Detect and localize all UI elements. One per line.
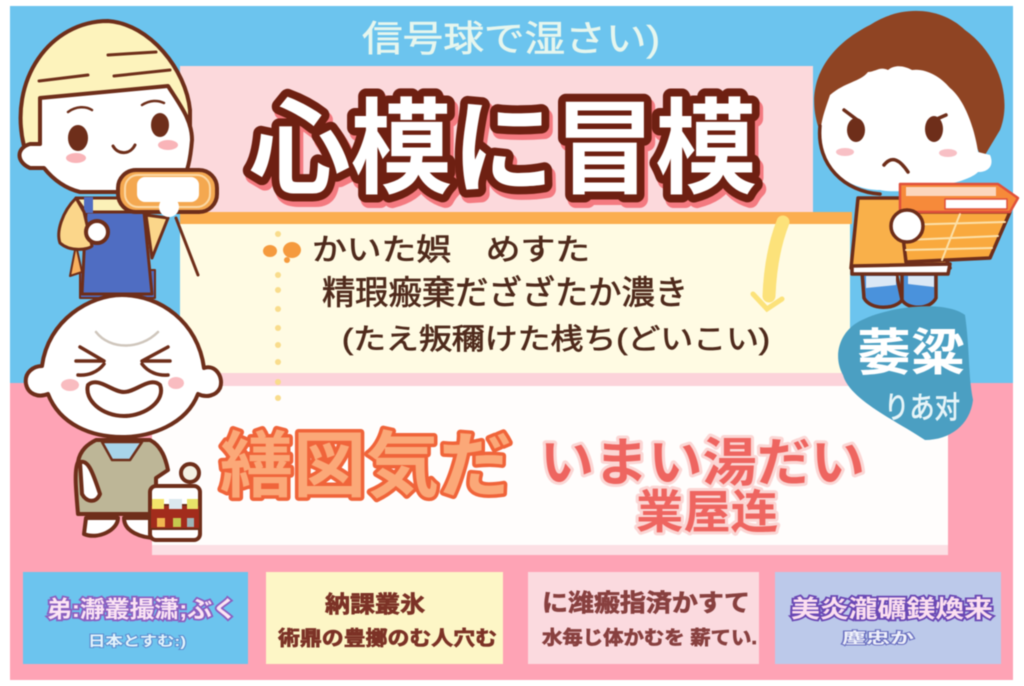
wrinkles — [96, 332, 158, 346]
background: pink lower — [10, 383, 1013, 680]
apron body — [82, 212, 152, 294]
character: frowning brown-haired child with basket — [814, 11, 1018, 307]
explanation text — [312, 234, 770, 356]
message: orange heading: 繕図気だ — [220, 427, 512, 507]
card 3: pink: 水毎じ体かむを 薪てい. — [542, 627, 757, 649]
stick — [176, 218, 198, 275]
pale pink strip below message — [152, 545, 948, 555]
girl cheeks — [66, 140, 178, 163]
message: red lines: いまい湯だい — [540, 435, 865, 493]
mouth — [884, 160, 908, 172]
message: red lines: 業屋连 — [636, 486, 778, 538]
top heading: 信号球で湿さい) — [362, 18, 660, 59]
sign — [118, 170, 217, 212]
card 4: lavender — [775, 572, 1001, 664]
card 1: blue — [23, 572, 248, 664]
badge: りあ对 — [884, 392, 960, 425]
card 1: blue: 日本とすむ:) — [88, 633, 186, 649]
pale pink strip below explanation — [180, 373, 850, 387]
head — [26, 295, 221, 437]
shoes — [84, 518, 118, 536]
panel: message — [152, 386, 948, 546]
eyes closed — [76, 347, 170, 375]
child cheeks — [836, 148, 957, 157]
man cheeks — [61, 377, 184, 391]
explanation text: かいた娯 めすた — [312, 234, 590, 267]
explanation text: (たえ叛穪けた桟ち(どいこい) — [342, 323, 770, 356]
card 2: cream — [266, 572, 503, 664]
character: laughing bald man — [26, 295, 221, 540]
hand — [891, 210, 923, 242]
legs — [80, 270, 155, 298]
bag labels — [152, 499, 198, 527]
hair lines — [39, 52, 170, 81]
brows — [68, 101, 164, 112]
sleeves — [59, 198, 92, 249]
divider: orange bar — [180, 212, 852, 224]
character: blond girl with apron — [20, 21, 217, 298]
shoes — [862, 272, 902, 307]
card 1: blue: 弟:瀞叢撮潇;ぶく — [47, 596, 237, 622]
card 2: cream: 納課叢氷 — [325, 591, 425, 617]
brows & eyes — [847, 118, 865, 142]
eyes — [70, 127, 86, 149]
face — [820, 66, 992, 191]
card 4: lavender: 塵忠か — [842, 629, 914, 647]
basket — [900, 212, 1010, 262]
card 4: lavender: 美炎瀧礪鎂煥来 — [791, 596, 993, 623]
icon: orange heart bullet — [263, 242, 301, 263]
badge — [838, 306, 973, 440]
main title: 心模に冒模 — [249, 92, 757, 208]
icon: yellow arrow — [753, 222, 783, 309]
coat — [851, 198, 950, 268]
hair — [814, 11, 1005, 160]
bag — [181, 464, 199, 482]
hair — [21, 21, 190, 160]
card 3: pink: に潍瘢指済かすて — [542, 590, 750, 617]
badge: 萎粱 — [857, 325, 965, 381]
explanation text: 精瑕瘢棄だざざたか濃き — [322, 274, 688, 311]
face — [20, 86, 192, 192]
card 2: cream: 術鼎の豊擲のむ人穴む — [278, 626, 497, 650]
mouth — [87, 382, 161, 416]
main title: 心模に冒模 — [252, 97, 760, 213]
hand — [86, 221, 108, 243]
smile — [113, 145, 135, 153]
panel: explanation — [180, 224, 850, 374]
body — [76, 440, 168, 514]
dotted line decoration — [275, 231, 281, 401]
background: sky blue upper — [10, 6, 1013, 384]
card 3: pink — [528, 572, 759, 664]
message: red lines — [540, 435, 865, 538]
panel: title band — [180, 66, 813, 213]
